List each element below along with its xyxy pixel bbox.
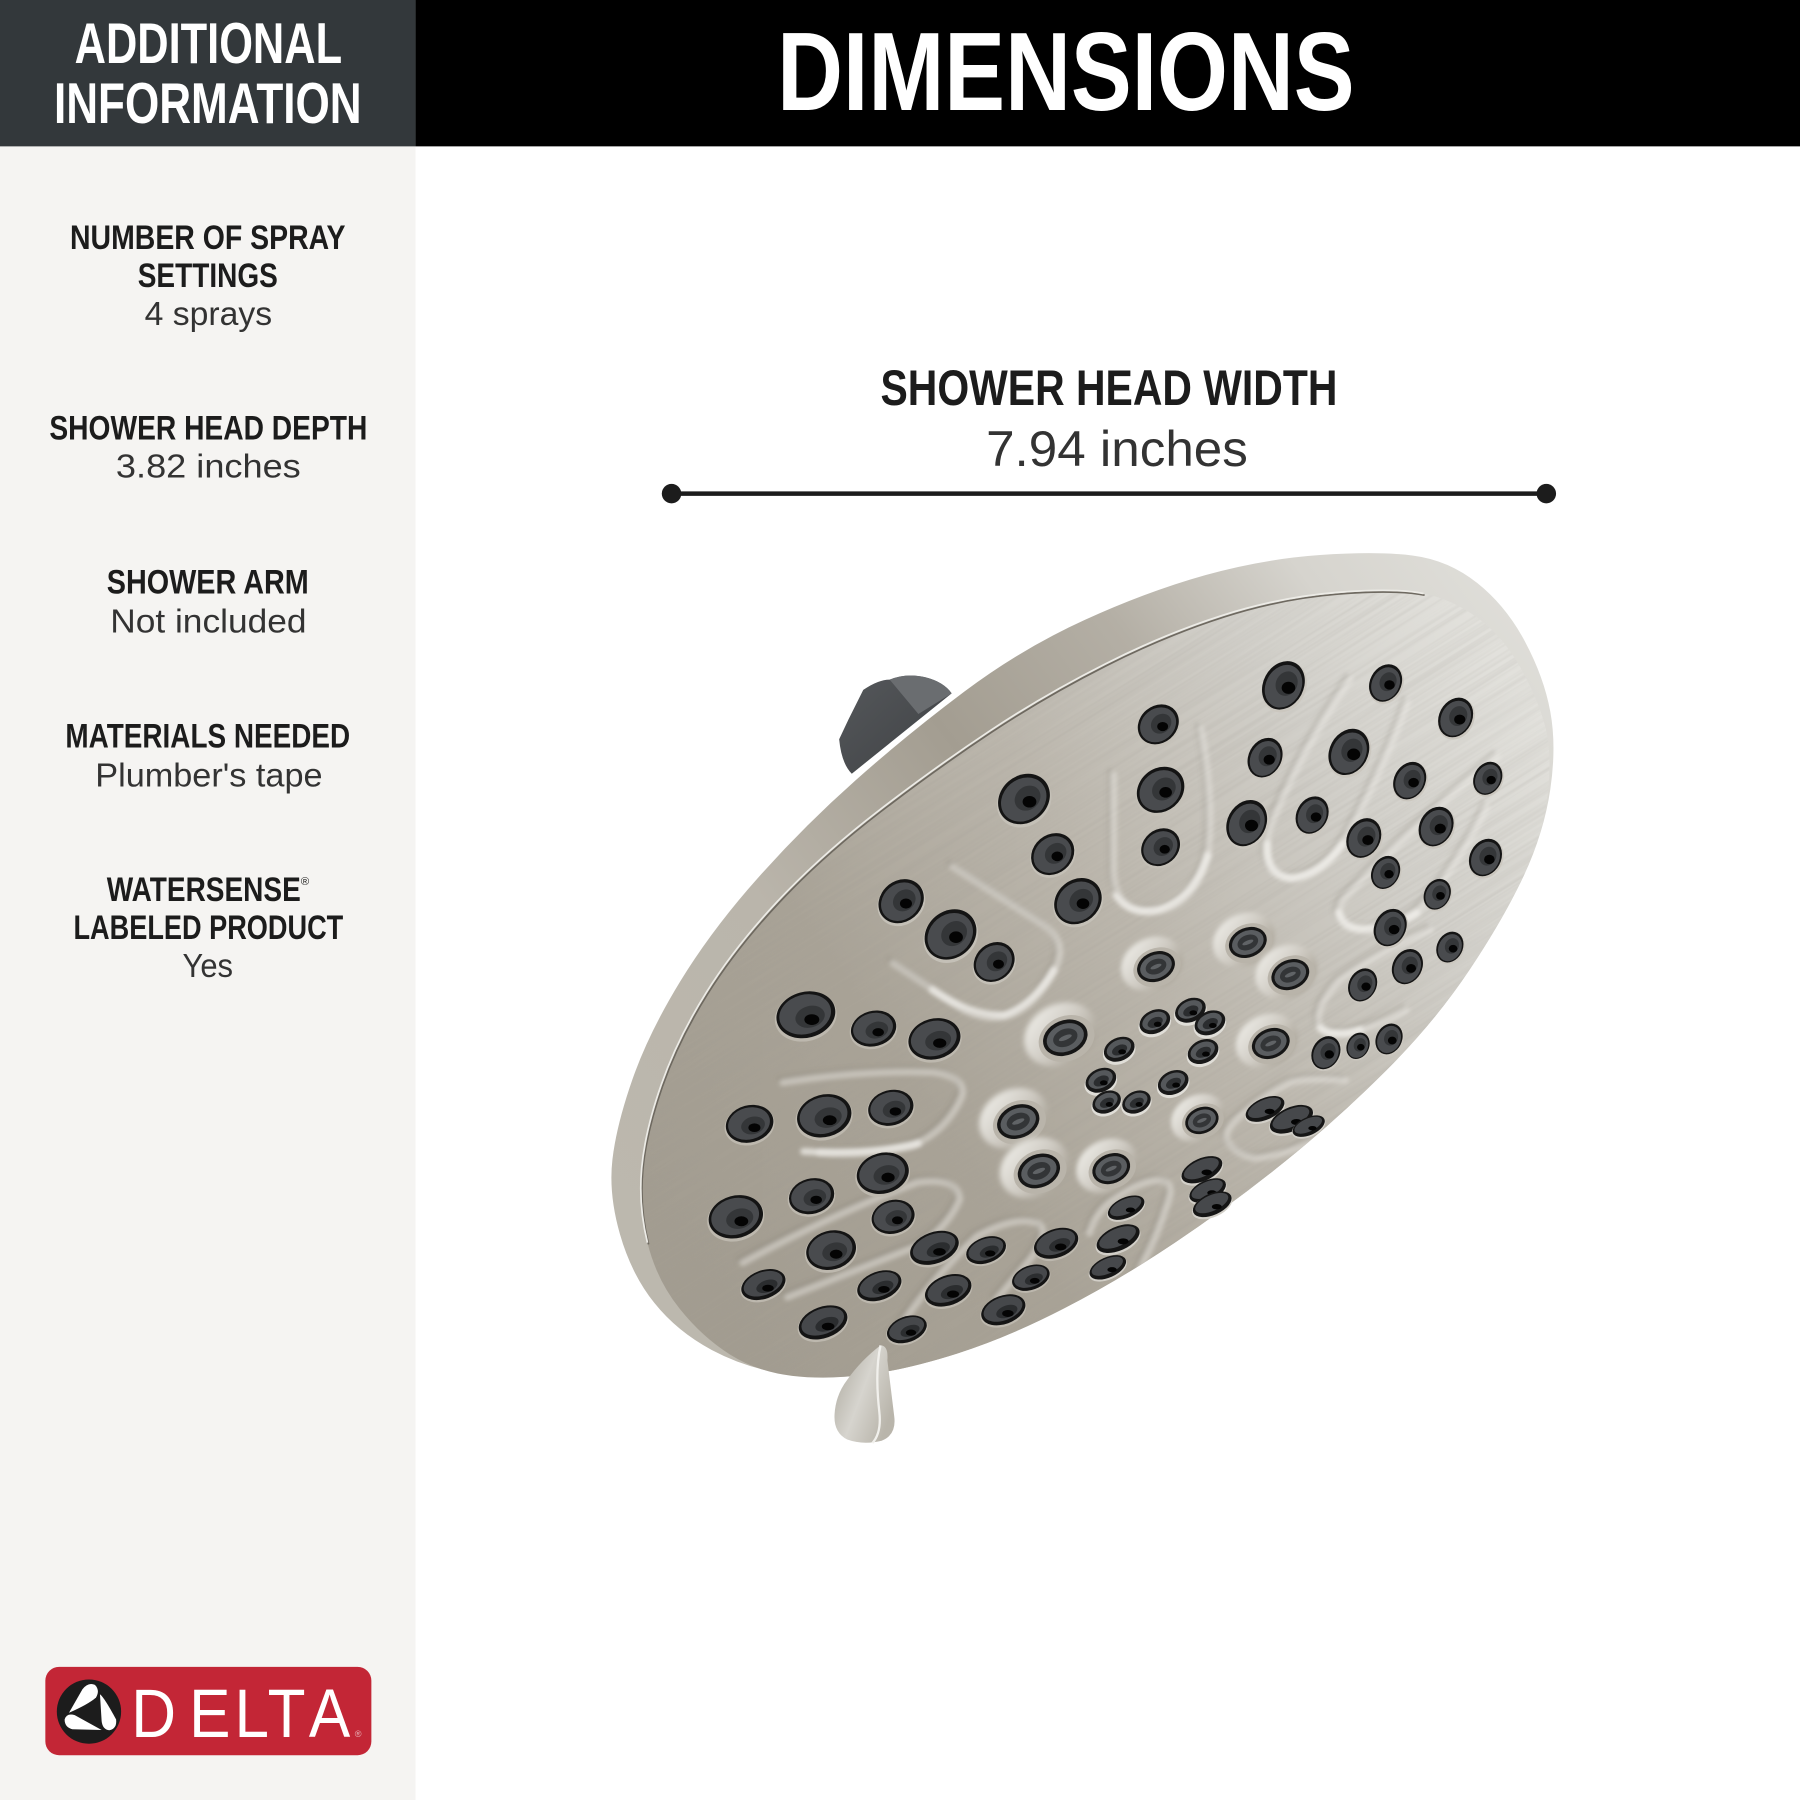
header band: dimensions title: DIMENSIONS bbox=[777, 9, 1355, 134]
width label bbox=[880, 359, 1337, 477]
logo: Delta: ® bbox=[355, 1729, 362, 1739]
brushed metal texture bbox=[1323, 593, 1550, 916]
spec: shower arm: SHOWER ARM bbox=[107, 563, 309, 601]
recessed spray channels bbox=[739, 676, 1497, 1337]
spec: shower arm: Not included bbox=[110, 604, 307, 641]
spec: number of spray settings: SETTINGS bbox=[138, 257, 278, 295]
spec: watersense labeled product: ® bbox=[301, 876, 310, 888]
header band: additional information: ADDITIONAL bbox=[75, 12, 342, 76]
head rim bbox=[611, 553, 1553, 1377]
header band: additional information bbox=[0, 0, 416, 146]
small center ring nozzles bbox=[1080, 993, 1231, 1121]
spec: shower head depth bbox=[49, 410, 367, 486]
spec: number of spray settings: NUMBER OF SPRAY bbox=[70, 219, 346, 257]
spec: watersense labeled product: LABELED PRODUCT bbox=[73, 909, 343, 947]
spec: shower head depth: SHOWER HEAD DEPTH bbox=[49, 410, 367, 448]
spec: watersense labeled product bbox=[73, 871, 343, 985]
spec: materials needed bbox=[65, 717, 350, 794]
header band: additional information: INFORMATION bbox=[54, 72, 362, 136]
spec: number of spray settings: 4 sprays bbox=[145, 296, 272, 333]
head face bbox=[641, 590, 1550, 1378]
spec: watersense labeled product: WATERSENSE bbox=[107, 871, 301, 909]
logo: Delta bbox=[45, 1667, 371, 1755]
spray nozzles: lower center and right edge bbox=[1085, 1091, 1329, 1287]
spec: materials needed: Plumber's tape bbox=[95, 757, 323, 794]
header band: dimensions title bbox=[416, 0, 1800, 146]
spec: watersense labeled product: Yes bbox=[183, 948, 233, 985]
spec: materials needed: MATERIALS NEEDED bbox=[65, 717, 350, 755]
arm connector bbox=[839, 675, 952, 774]
logo: Delta: DELTA bbox=[131, 1675, 351, 1752]
width label: SHOWER HEAD WIDTH bbox=[880, 359, 1337, 416]
width dimension line bbox=[662, 484, 1556, 503]
width label: 7.94 inches bbox=[986, 420, 1248, 477]
channel bright highlights bbox=[804, 844, 1417, 1152]
spray nozzles: upper right bbox=[1218, 653, 1510, 1077]
panel: sidebar background bbox=[0, 146, 416, 1800]
spec: shower arm bbox=[107, 563, 309, 641]
spray nozzles: upper center bbox=[868, 696, 1196, 993]
spec: shower head depth: 3.82 inches bbox=[116, 449, 301, 486]
shower head product illustration bbox=[611, 553, 1554, 1444]
spray selector lever bbox=[834, 1345, 895, 1443]
spray nozzles: lower bbox=[736, 1222, 1084, 1351]
spec: number of spray settings bbox=[70, 219, 346, 333]
cupped center nozzles bbox=[968, 902, 1327, 1210]
face edge highlight bbox=[641, 590, 1425, 1244]
spray nozzles: left bbox=[702, 985, 967, 1279]
